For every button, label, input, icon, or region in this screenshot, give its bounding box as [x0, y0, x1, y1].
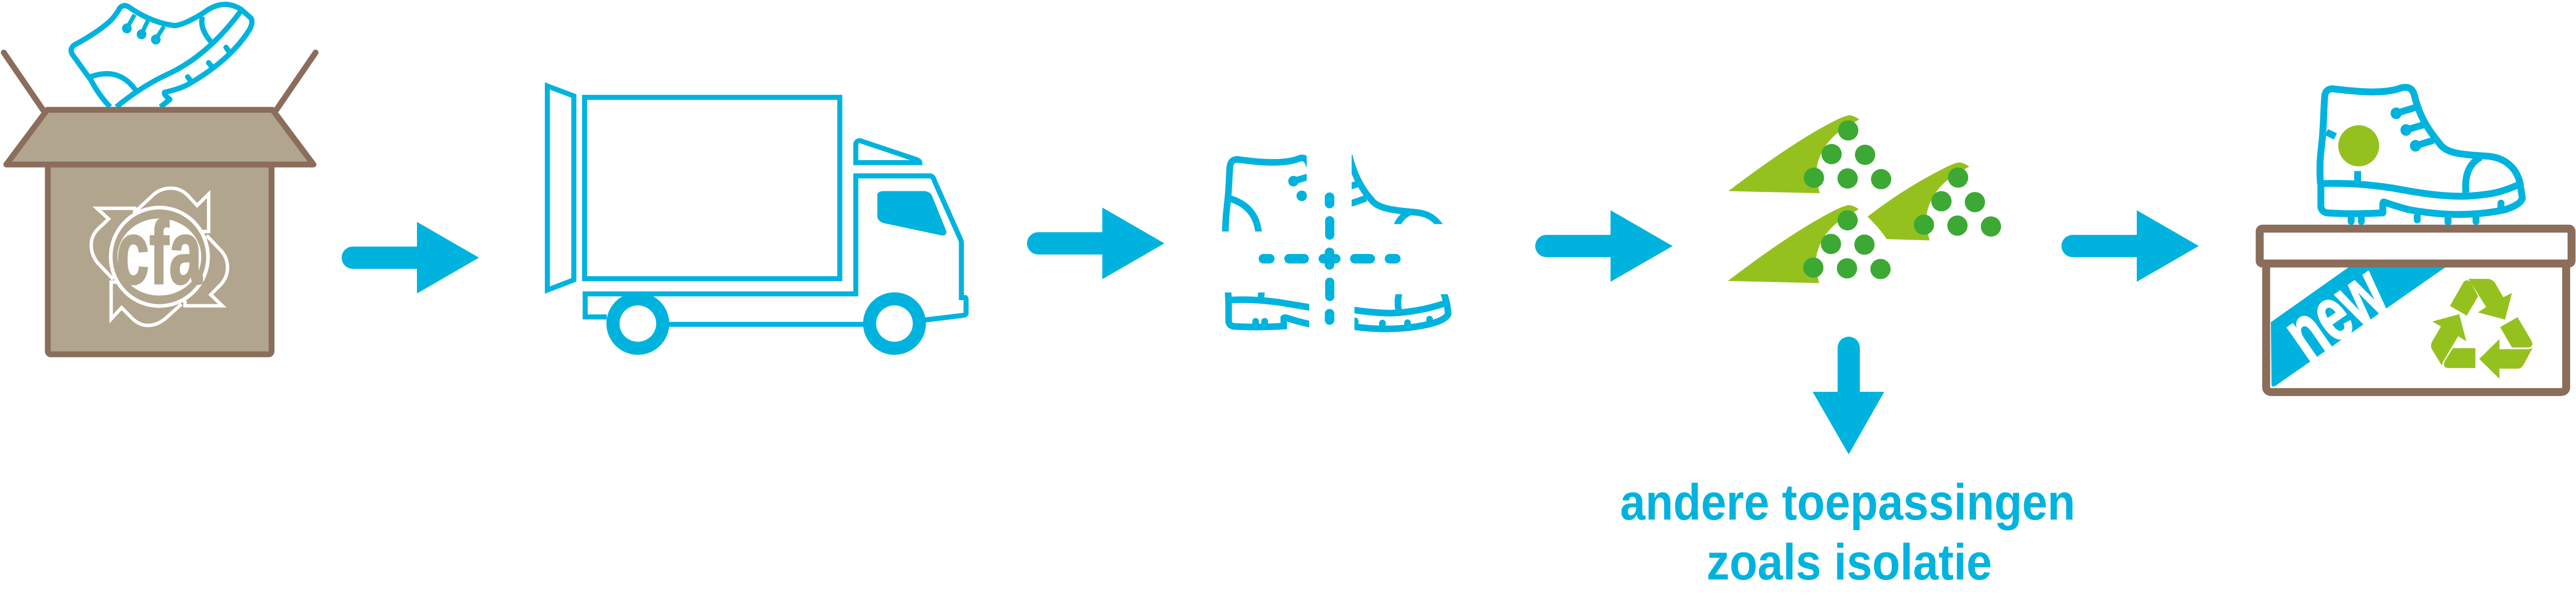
- text line 1: andere toepassingen: [1620, 474, 2075, 531]
- boot fragment: bottom right: [1354, 293, 1448, 329]
- shoebox lid: [2260, 229, 2572, 264]
- panel: shredded granulate piles: [1728, 115, 2001, 283]
- icon: cardboard box with logo: [4, 52, 316, 354]
- label: new: new: [2268, 248, 2401, 376]
- cut lines: [1259, 192, 1400, 325]
- text line 2: zoals isolatie: [1707, 534, 1992, 591]
- panel: boot cut into pieces: [1225, 155, 1448, 329]
- cab roof window: [856, 141, 920, 163]
- blue new band: [2271, 267, 2445, 387]
- front wheel: [863, 292, 926, 355]
- pile: top left: [1728, 115, 1891, 193]
- text: other applications: [1620, 474, 2075, 591]
- arrow 1: [342, 222, 479, 294]
- panel: used shoe in cardboard box: [4, 4, 316, 354]
- arrow down: [1813, 337, 1884, 454]
- windshield: [877, 191, 946, 235]
- cab and chassis: [585, 176, 966, 320]
- pile: bottom left: [1728, 205, 1891, 283]
- shoebox body: [2266, 264, 2566, 392]
- truck door: [547, 86, 574, 290]
- boot fragment: bottom left: [1228, 292, 1310, 327]
- icon: recycling symbol: [2431, 279, 2533, 379]
- cargo box: [585, 98, 840, 279]
- chassis rail: [667, 322, 865, 327]
- rear wheel: [606, 292, 669, 355]
- panel: delivery truck: [547, 86, 966, 355]
- logo text: cfa: [116, 203, 203, 303]
- pile: right: [1867, 162, 2001, 240]
- boot fragment: top left: [1225, 158, 1309, 233]
- arrow 2: [1027, 208, 1164, 279]
- arrow 3: [1535, 210, 1673, 282]
- arrow 4: [2061, 210, 2199, 282]
- green dot on boot: [2338, 125, 2379, 166]
- boot fragment: top right: [1349, 155, 1440, 226]
- panel: new boot on new shoebox: [2260, 87, 2572, 392]
- icon: blue shoe falling into box: [71, 4, 252, 107]
- icon: new boot: [2320, 87, 2522, 222]
